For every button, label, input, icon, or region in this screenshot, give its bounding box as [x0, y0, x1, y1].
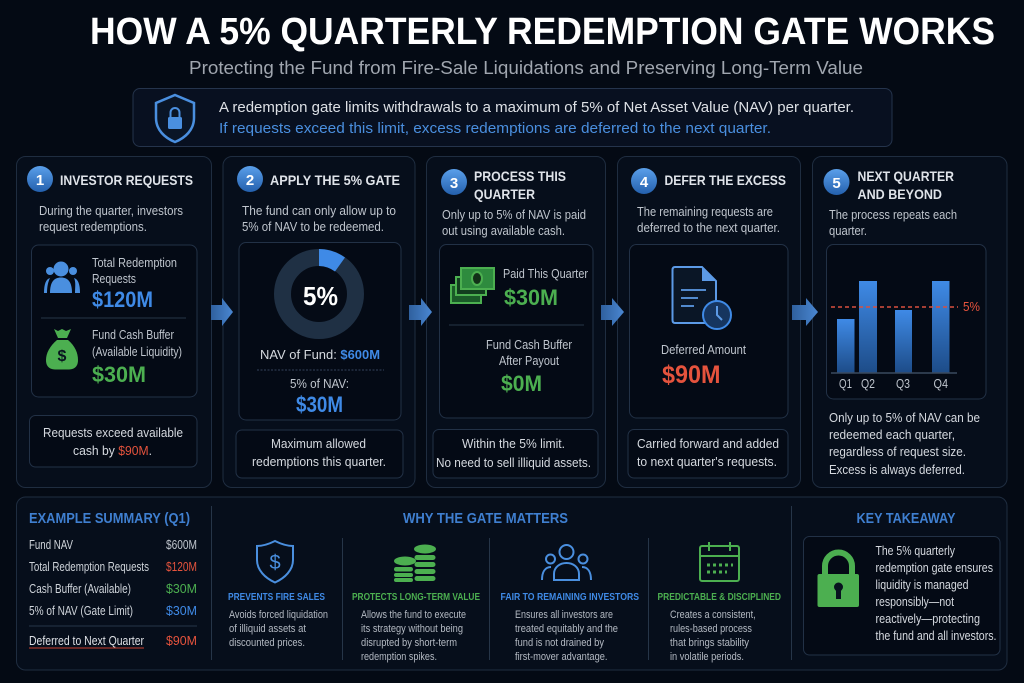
panel: step 4 defer the excess [618, 156, 800, 488]
key takeaway box: responsibly—not [876, 594, 954, 609]
note text [829, 410, 980, 477]
definition banner [133, 88, 892, 146]
icon: shield with lock [156, 95, 194, 142]
benefit: predictable and disciplined [658, 542, 781, 663]
key takeaway box [804, 536, 1000, 655]
icon: money bag [46, 329, 78, 370]
arrow 4 to 5 [792, 298, 818, 326]
heading: INVESTOR REQUESTS [60, 172, 193, 188]
5 percent of NAV [290, 377, 349, 417]
panel: bottom summary strip [16, 497, 1007, 670]
fund cash buffer: $30M [92, 362, 146, 387]
example summary table: $90M [166, 633, 197, 648]
icon: padlock [818, 552, 859, 607]
benefit: predictable and disciplined: Creates a consistent, [670, 609, 756, 621]
heading [858, 168, 954, 202]
example summary table [29, 511, 197, 648]
callout: Maximum allowed [271, 436, 366, 451]
benefit: predictable and disciplined: in volatile periods. [670, 651, 744, 663]
icon: shield dollar: $ [269, 552, 281, 574]
step number 1 [27, 166, 53, 192]
benefit: protects long-term value [352, 544, 480, 663]
paid this quarter: $30M [504, 285, 558, 310]
key takeaway box: redemption gate ensures [876, 560, 993, 575]
donut chart: 5% [303, 281, 338, 311]
description: request redemptions. [39, 220, 147, 234]
bar chart: Q4 [934, 377, 948, 391]
key takeaway heading: KEY TAKEAWAY [856, 511, 956, 527]
step number 4: 4 [640, 174, 649, 191]
heading [474, 168, 566, 202]
description: The process repeats each [829, 208, 957, 222]
cash buffer after payout [486, 338, 572, 396]
benefit: prevents fire sales [228, 541, 328, 649]
fund cash buffer [92, 328, 182, 387]
benefit: prevents fire sales: Avoids forced liquidation [229, 609, 328, 621]
description [39, 204, 183, 234]
heading: QUARTER [474, 186, 535, 202]
benefit: predictable and disciplined: rules-based process [670, 623, 752, 635]
benefit: fair to remaining investors [500, 545, 639, 663]
5 percent of NAV: 5% of NAV: [290, 377, 349, 391]
deferred box [630, 244, 788, 418]
description: During the quarter, investors [39, 204, 183, 218]
description: 5% of NAV to be redeemed. [242, 220, 384, 234]
description: The fund can only allow up to [242, 204, 396, 218]
subtitle: Protecting the Fund from Fire-Sale Liquidations and Preserving Long-Term Value [189, 58, 863, 78]
note text: regardless of request size. [829, 444, 966, 459]
callout: Requests exceed available [43, 425, 183, 440]
why the gate matters heading: WHY THE GATE MATTERS [403, 511, 568, 527]
total redemption requests: $120M [92, 287, 153, 312]
benefit: prevents fire sales: of illiquid assets at [229, 623, 306, 635]
benefit: fair to remaining investors: first-mover advantage. [515, 651, 608, 663]
benefit: prevents fire sales: discounted prices. [229, 637, 305, 649]
payout box [440, 244, 593, 418]
paid this quarter [503, 267, 588, 310]
description: quarter. [829, 224, 867, 238]
key takeaway box: liquidity is managed [876, 577, 968, 592]
cash buffer after payout: Fund Cash Buffer [486, 338, 572, 352]
benefit: fair to remaining investors: Ensures all investors are [515, 609, 613, 621]
benefit: protects long-term value: Allows the fund to execute [361, 609, 466, 621]
description: out using available cash. [442, 224, 565, 238]
cash buffer after payout: After Payout [499, 354, 559, 368]
key takeaway box: reactively—protecting [876, 611, 980, 626]
bar chart: Q3 [896, 377, 910, 391]
example summary table: 5% of NAV (Gate Limit) [29, 604, 133, 618]
key takeaway box: The 5% quarterly [876, 543, 955, 558]
benefit: prevents fire sales: PREVENTS FIRE SALES [228, 591, 325, 603]
banner text: A redemption gate limits withdrawals to a maximum of 5% of Net Asset Value (NAV) per quarter. [219, 99, 854, 116]
heading: DEFER THE EXCESS [664, 172, 786, 188]
callout [236, 430, 403, 478]
step number 3 [441, 169, 467, 195]
5 percent of NAV: $30M [296, 392, 343, 417]
deferred amount: $90M [662, 361, 720, 389]
benefit: protects long-term value: redemption spikes. [361, 651, 437, 663]
callout [628, 430, 788, 478]
callout: cash by $90M. [73, 443, 152, 458]
callout: Within the 5% limit. [462, 436, 565, 451]
description [242, 204, 396, 234]
description [637, 205, 780, 235]
example summary table: $30M [166, 603, 197, 618]
bar chart: 5% [963, 300, 980, 314]
callout: to next quarter's requests. [637, 454, 777, 469]
benefit: protects long-term value: PROTECTS LONG-TERM VALUE [352, 591, 480, 603]
deferred amount: Deferred Amount [661, 343, 746, 357]
panel: step 3 process this quarter [426, 156, 606, 488]
banner text [219, 99, 854, 137]
banner text: If requests exceed this limit, excess redemptions are deferred to the next quarter. [219, 120, 771, 137]
callout: Carried forward and added [637, 436, 779, 451]
example summary table: EXAMPLE SUMMARY (Q1) [29, 511, 190, 527]
callout [433, 430, 598, 478]
arrow 1 to 2 [211, 298, 233, 326]
panel: step 2 apply the gate [223, 156, 415, 488]
step number 5 [824, 169, 850, 195]
heading: APPLY THE 5% GATE [270, 172, 400, 188]
panel: step 5 next quarter and beyond [812, 156, 1007, 488]
note text: Only up to 5% of NAV can be [829, 410, 980, 425]
step number 1: 1 [36, 172, 44, 189]
example summary table: Cash Buffer (Available) [29, 582, 131, 596]
callout: No need to sell illiquid assets. [436, 455, 591, 470]
arrow 2 to 3 [409, 298, 432, 326]
note text: Excess is always deferred. [829, 462, 965, 477]
description [442, 208, 586, 238]
example summary table: Total Redemption Requests [29, 560, 149, 574]
icon: coin stacks [394, 544, 436, 582]
step number 2: 2 [246, 172, 254, 189]
benefit: protects long-term value: its strategy without being [361, 623, 463, 635]
note text: redeemed each quarter, [829, 427, 955, 442]
total redemption requests: Total Redemption [92, 256, 177, 270]
fund cash buffer: Fund Cash Buffer [92, 328, 174, 342]
example summary table: Fund NAV [29, 538, 74, 552]
cash buffer after payout: $0M [501, 371, 542, 396]
bar chart [826, 244, 986, 399]
heading: NEXT QUARTER [858, 168, 954, 184]
deferred amount [661, 343, 746, 389]
donut chart [282, 249, 356, 330]
panel: step 1 investor requests [16, 156, 212, 488]
icon: people [44, 262, 80, 293]
icon: calendar [700, 542, 739, 581]
total redemption requests [92, 256, 177, 312]
benefit: predictable and disciplined: that brings stability [670, 637, 749, 649]
total redemption requests: Requests [92, 272, 136, 286]
bar chart: Q1 [839, 377, 852, 391]
metrics box [32, 245, 197, 397]
benefit: fair to remaining investors: fund is not drained by [515, 637, 604, 649]
gate box [239, 242, 401, 420]
NAV of fund: NAV of Fund: $600M [260, 347, 380, 362]
icon: document with clock [672, 267, 731, 329]
step number 4 [631, 168, 657, 194]
fund cash buffer: (Available Liquidity) [92, 345, 182, 359]
description [829, 208, 957, 238]
description: The remaining requests are [637, 205, 773, 219]
heading: AND BEYOND [858, 186, 942, 202]
icon: people outline [542, 545, 591, 580]
key takeaway box: the fund and all investors. [876, 628, 996, 643]
benefit: fair to remaining investors: FAIR TO REMAINING INVESTORS [500, 591, 639, 603]
description: deferred to the next quarter. [637, 221, 780, 235]
description: Only up to 5% of NAV is paid [442, 208, 586, 222]
icon: money bag: $ [58, 348, 67, 365]
callout [30, 416, 197, 467]
step number 2 [237, 166, 263, 192]
example summary table: Deferred to Next Quarter [29, 634, 144, 648]
example summary table: $120M [166, 559, 197, 574]
benefit: fair to remaining investors: treated equitably and the [515, 623, 618, 635]
step number 5: 5 [832, 175, 841, 192]
icon: cash stack [451, 268, 494, 303]
benefit: predictable and disciplined: PREDICTABLE & DISCIPLINED [658, 591, 781, 603]
heading: PROCESS THIS [474, 168, 566, 184]
bar chart: Q2 [861, 377, 875, 391]
paid this quarter: Paid This Quarter [503, 267, 588, 281]
callout: redemptions this quarter. [252, 454, 386, 469]
example summary table: $600M [166, 537, 197, 552]
example summary table: $30M [166, 581, 197, 596]
step number 3: 3 [450, 175, 458, 192]
arrow 3 to 4 [601, 298, 624, 326]
benefit: protects long-term value: disrupted by short-term [361, 637, 457, 649]
